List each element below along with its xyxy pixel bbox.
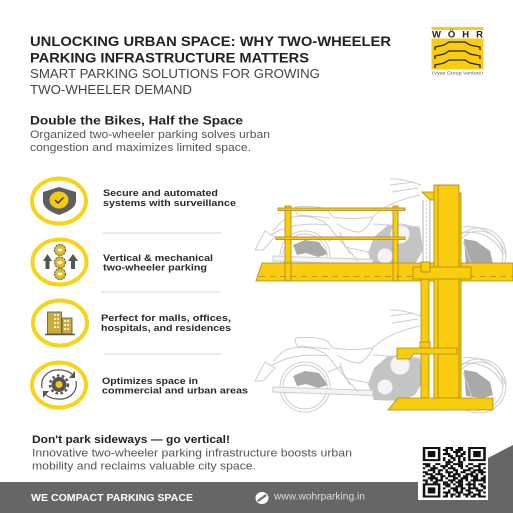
icon: gear with arrows xyxy=(32,362,86,408)
closing heading: Don't park sideways — go vertical! xyxy=(32,434,230,446)
closing text: mobility and reclaims valuable city space. xyxy=(32,460,256,472)
intro text: congestion and maximizes limited space. xyxy=(30,142,251,154)
feature: locations xyxy=(33,300,231,346)
feature text: hospitals, and residences xyxy=(101,323,231,334)
logo: WOHR: (Vyas Group Venture) xyxy=(432,70,484,76)
feature: security xyxy=(32,178,236,224)
feature text xyxy=(102,376,248,396)
main column xyxy=(422,185,461,398)
closing text xyxy=(32,448,352,472)
subtitle: TWO-WHEELER DEMAND xyxy=(30,83,192,97)
upper deck guard rails xyxy=(276,206,405,281)
icon: gears and arrows xyxy=(32,240,86,284)
thin guide post xyxy=(420,200,430,398)
feature text: two-wheeler parking xyxy=(103,262,207,274)
feature text: Optimizes space in xyxy=(102,376,198,387)
feature text: Vertical & mechanical xyxy=(103,253,213,264)
icon: link xyxy=(256,492,268,504)
icon: buildings xyxy=(33,300,87,346)
subtitle: SMART PARKING SOLUTIONS FOR GROWING xyxy=(30,67,320,81)
upper carriage bracket xyxy=(413,262,471,279)
feature text: commercial and urban areas xyxy=(102,386,248,396)
feature: vertical parking xyxy=(32,240,213,284)
closing text: Innovative two-wheeler parking infrastructure boosts urban xyxy=(32,448,352,460)
lower carriage bracket xyxy=(397,348,457,359)
title xyxy=(30,34,391,66)
footer band xyxy=(0,445,513,513)
feature text: Perfect for malls, offices, xyxy=(101,313,231,324)
intro text xyxy=(30,129,270,154)
website: www.wohrparking.in xyxy=(273,492,365,502)
upper motorcycle xyxy=(254,178,506,263)
feature text xyxy=(103,253,213,274)
intro text: Organized two-wheeler parking solves urban xyxy=(30,129,270,141)
lower motorcycle xyxy=(255,310,506,413)
intro block xyxy=(30,114,270,154)
feature text xyxy=(103,188,236,209)
upper deck platform xyxy=(256,263,513,281)
logo: WOHR xyxy=(432,27,484,76)
title: PARKING INFRASTRUCTURE MATTERS xyxy=(30,50,309,66)
feature: optimize space xyxy=(32,362,248,408)
closing block xyxy=(32,434,352,472)
icon: shield xyxy=(32,178,86,224)
header text xyxy=(30,34,391,97)
subtitle xyxy=(30,67,320,97)
base plate xyxy=(388,398,493,410)
feature text: Secure and automated xyxy=(103,188,218,199)
QR code xyxy=(418,444,488,500)
parking lift machine xyxy=(256,185,513,410)
footer text: WE COMPACT PARKING SPACE xyxy=(31,493,193,504)
feature text xyxy=(101,313,231,334)
intro heading: Double the Bikes, Half the Space xyxy=(30,114,243,128)
logo: WOHR: WÖHR xyxy=(432,30,483,40)
feature text: systems with surveillance xyxy=(103,198,236,209)
title: UNLOCKING URBAN SPACE: WHY TWO-WHEELER xyxy=(30,34,391,49)
